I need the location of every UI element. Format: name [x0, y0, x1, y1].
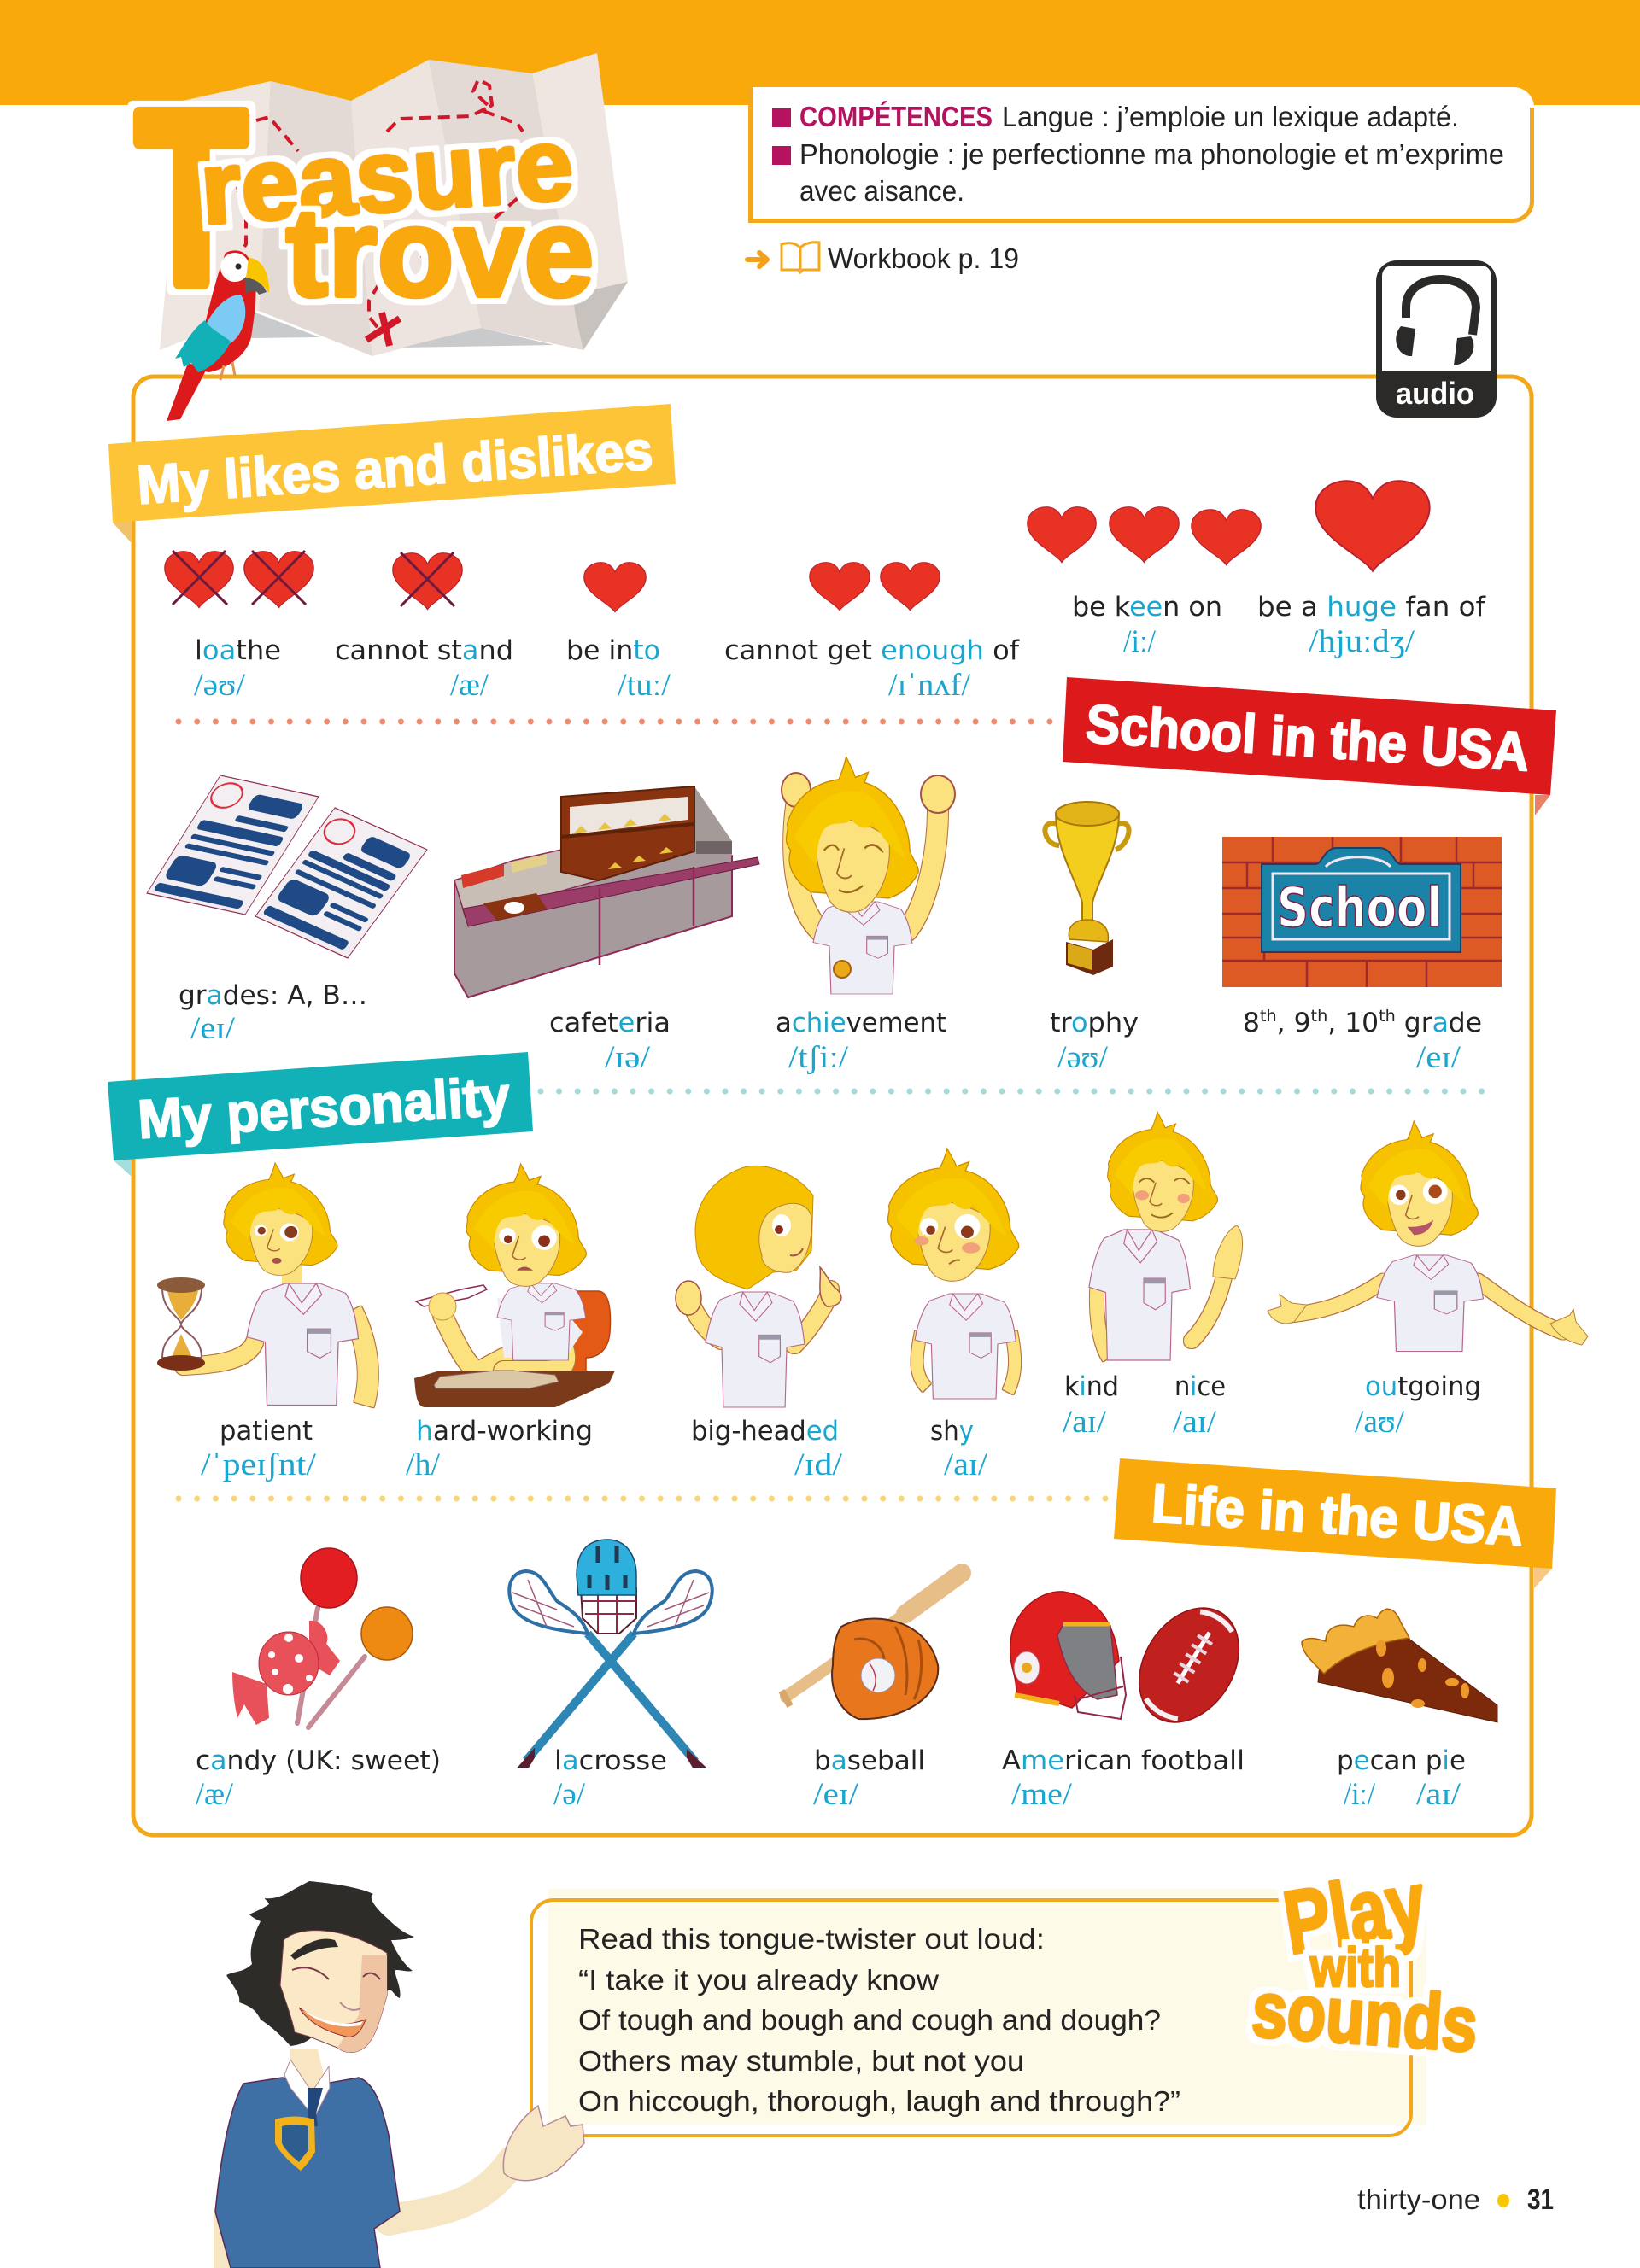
row 3 labels: /aɪ/	[1173, 1405, 1217, 1440]
illustration: school sign on brick wall	[1222, 837, 1502, 987]
row 4 labels: /iː/	[1344, 1777, 1376, 1812]
page number footer: 31	[1527, 2183, 1554, 2216]
competences box	[748, 87, 1534, 223]
row 2 labels: /eɪ/	[1416, 1040, 1461, 1075]
competences box: Phonologie : je perfectionne ma phonologie et m’exprime	[800, 138, 1504, 170]
competences box: Langue : j’emploie un lexique adapté.	[1002, 101, 1459, 132]
page number footer	[1357, 2183, 1554, 2216]
row 3 labels: big-headed	[691, 1416, 839, 1447]
row 3 labels: outgoing	[1365, 1371, 1481, 1402]
Play with sounds logo: Play	[1277, 1853, 1432, 1973]
tongue-twister box: Others may stumble, but not you	[578, 2045, 1024, 2077]
row 3 labels: /h/	[406, 1447, 441, 1482]
ribbon: My likes and dislikes	[108, 404, 676, 543]
workbook reference: Workbook p. 19	[828, 243, 1019, 274]
hearts: cannot stand	[393, 552, 462, 610]
ribbon: My likes and dislikes: My likes and dislikes	[135, 419, 655, 516]
row 1 labels: cannot stand	[335, 635, 513, 666]
row 2 labels: /tʃiː/	[788, 1040, 849, 1075]
top banner	[0, 0, 1640, 105]
row 4 labels: baseball	[814, 1745, 925, 1776]
competences box: avec aisance.	[800, 175, 964, 207]
row 2 labels: th	[1311, 1007, 1327, 1026]
illustration: candy and lollipops	[232, 1548, 413, 1727]
ribbon: School in the USA	[1063, 677, 1556, 815]
illustration: school sign on brick wall: School	[1277, 877, 1442, 940]
heart: be a huge fan of	[1315, 481, 1430, 571]
row 4 labels: candy (UK: sweet)	[196, 1745, 441, 1776]
illustration: pecan pie	[1302, 1609, 1497, 1722]
ribbon: My personality: My personality	[136, 1065, 512, 1150]
Play with sounds logo: with	[1309, 1937, 1401, 1998]
figure: patient boy with hourglass	[157, 1163, 368, 1406]
dotted divider teal	[541, 1088, 1485, 1095]
row 4 labels: /me/	[1011, 1777, 1073, 1812]
Play with sounds logo: sounds	[1250, 1966, 1480, 2068]
hearts: loathe	[165, 551, 313, 608]
audio badge	[1376, 260, 1496, 418]
row 3 labels: nice	[1174, 1371, 1226, 1402]
figure: big-headed boy	[676, 1166, 841, 1407]
row 2 labels: grades: A, B…	[179, 980, 367, 1011]
row 4 labels: lacrosse	[554, 1745, 667, 1776]
dotted divider salmon	[179, 719, 1059, 724]
parrot mascot	[167, 250, 269, 421]
ribbon: My personality	[108, 1052, 533, 1177]
row 3 labels: /aɪ/	[944, 1447, 988, 1482]
row 1 labels: loathe	[195, 635, 281, 666]
workbook reference	[747, 243, 1019, 274]
row 2 labels: /eɪ/	[190, 1011, 236, 1046]
page number footer: thirty-one	[1357, 2183, 1480, 2215]
treasure map illustration	[160, 53, 628, 356]
row 1 labels: be a huge fan of	[1257, 592, 1486, 623]
row 2 labels: th	[1260, 1007, 1277, 1026]
row 2 labels: th	[1379, 1007, 1396, 1026]
dotted divider yellow	[179, 1496, 1108, 1501]
row 2 labels: achievement	[776, 1008, 946, 1038]
row 2 labels: , 10	[1327, 1008, 1379, 1038]
tongue-twister box: “I take it you already know	[578, 1964, 939, 1996]
presenter boy	[214, 1881, 584, 2268]
illustration: American football helmet and ball	[1010, 1589, 1259, 1741]
row 4 labels: American football	[1002, 1745, 1245, 1776]
row 1 labels: be into	[566, 635, 660, 666]
illustration: graded papers	[147, 775, 427, 958]
row 4 labels: /ə/	[554, 1777, 586, 1812]
row 3 labels: shy	[930, 1416, 974, 1447]
Play with sounds logo	[1250, 1853, 1480, 2068]
row 4 labels	[196, 1745, 1466, 1812]
row 2 labels: trophy	[1050, 1008, 1139, 1038]
tongue-twister box: Of tough and bough and cough and dough?	[578, 2004, 1161, 2036]
row 1 labels: cannot get enough of	[724, 635, 1020, 666]
illustration: cafeteria counter	[454, 786, 759, 997]
illustration: lacrosse sticks and helmet	[509, 1540, 712, 1766]
row 3 labels: patient	[220, 1416, 313, 1447]
row 1 labels: /ɪˈnʌf/	[888, 668, 971, 703]
illustration: trophy	[1045, 802, 1128, 975]
row 2 labels: cafeteria	[549, 1008, 671, 1038]
figure: kind and nice boy	[1089, 1112, 1243, 1360]
row 1 labels: /iː/	[1123, 624, 1157, 659]
tongue-twister box: Read this tongue-twister out loud:	[578, 1923, 1045, 1955]
row 1 labels: /əʊ/	[194, 668, 246, 703]
main vocabulary panel	[133, 377, 1532, 1835]
title: trove	[286, 183, 594, 322]
row 3 labels: /ɪd/	[794, 1447, 843, 1482]
illustration: achievement boy	[782, 757, 955, 994]
heart: be into	[584, 563, 646, 612]
ribbon: Life in the USA	[1114, 1458, 1556, 1588]
row 1 labels: be keen on	[1072, 592, 1222, 623]
ribbon: School in the USA: School in the USA	[1084, 693, 1532, 783]
row 4 labels: /æ/	[196, 1777, 234, 1812]
row 4 labels: pecan pie	[1337, 1745, 1466, 1776]
figure: outgoing boy	[1268, 1121, 1588, 1351]
row 3 labels: hard-working	[416, 1416, 593, 1447]
row 4 labels: /aɪ/	[1416, 1777, 1461, 1812]
row 4 labels: /eɪ/	[813, 1777, 859, 1812]
row 2 labels: ade	[1432, 1008, 1482, 1038]
row 3 labels: /ˈpeɪʃnt/	[201, 1447, 317, 1482]
row 3 labels: /aɪ/	[1063, 1405, 1107, 1440]
row 1 labels: /æ/	[450, 668, 489, 703]
row 2 labels: /əʊ/	[1057, 1040, 1109, 1075]
illustration: baseball bat and glove	[782, 1573, 962, 1719]
row 2 labels: /ɪə/	[605, 1040, 651, 1075]
row 1 labels: /hjuːdʒ/	[1309, 624, 1415, 659]
row 2 labels: , 9	[1277, 1008, 1311, 1038]
ribbon: Life in the USA: Life in the USA	[1150, 1472, 1526, 1558]
tongue-twister box: On hiccough, thorough, laugh and through?”	[578, 2085, 1180, 2117]
title: reasure	[197, 107, 577, 246]
row 1 labels	[194, 592, 1486, 703]
row 2 labels	[179, 980, 1482, 1075]
tongue-twister box	[531, 1889, 1426, 2136]
hearts: cannot get enough	[810, 563, 940, 611]
title: T	[137, 62, 246, 334]
row 3 labels: /aʊ/	[1355, 1405, 1405, 1440]
row 1 labels: /tuː/	[618, 668, 671, 703]
figure: hard-working boy at desk	[414, 1164, 615, 1407]
row 3 labels: kind	[1064, 1371, 1119, 1402]
figure: shy boy	[887, 1149, 1019, 1399]
row 3 labels	[201, 1371, 1481, 1482]
row 2 labels: 8	[1243, 1008, 1260, 1038]
audio badge: audio	[1396, 376, 1474, 411]
title	[137, 62, 594, 334]
row 2 labels: gr	[1396, 1008, 1432, 1038]
competences box: COMPÉTENCES	[800, 101, 993, 132]
hearts: be keen on	[1028, 507, 1261, 565]
